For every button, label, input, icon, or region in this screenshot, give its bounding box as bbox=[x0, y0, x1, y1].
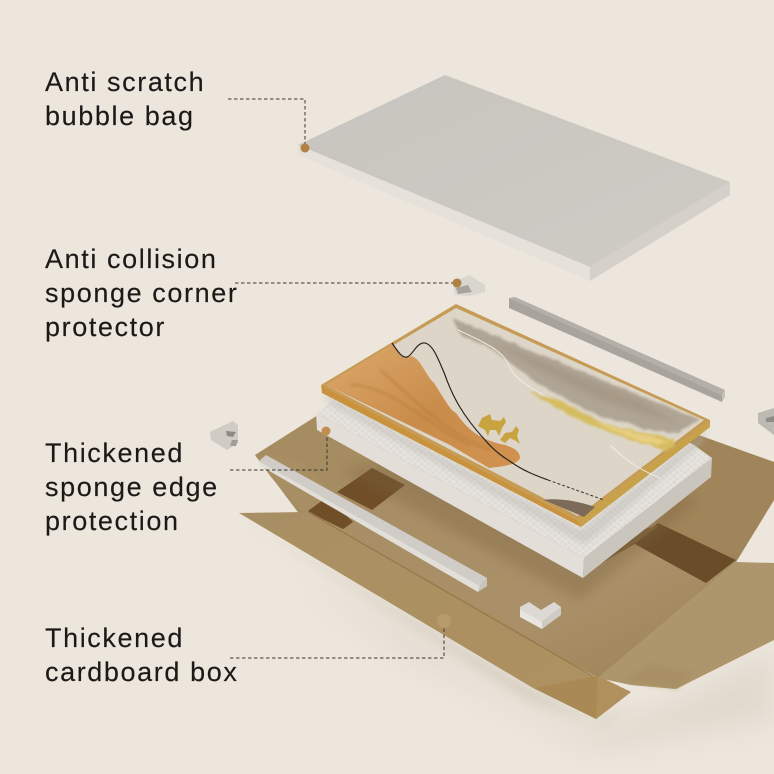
label: corner protector: protector bbox=[45, 312, 166, 342]
label: edge protection bbox=[45, 438, 219, 536]
deer bbox=[478, 414, 520, 444]
sponge shadow bbox=[340, 440, 700, 600]
label: bubble bag bbox=[45, 67, 205, 131]
box right front flap bbox=[598, 562, 774, 689]
label: edge protection: sponge edge bbox=[45, 472, 219, 502]
orange hill bbox=[326, 344, 520, 468]
label: corner protector bbox=[45, 244, 238, 342]
canvas bbox=[321, 304, 710, 520]
brown hill bbox=[544, 499, 595, 517]
box floor bbox=[342, 485, 736, 678]
dark inner wall left bbox=[337, 468, 405, 510]
grey-brown cloud bbox=[452, 318, 700, 434]
box front flap bbox=[239, 512, 596, 688]
box outer left side bbox=[255, 455, 340, 518]
bubble bag board bbox=[298, 75, 730, 281]
callout dots bbox=[300, 144, 462, 628]
painting shadow on sponge bbox=[322, 393, 710, 545]
framed painting bbox=[321, 304, 710, 527]
label: cardboard box: cardboard box bbox=[45, 657, 238, 687]
label: corner protector: Anti collision bbox=[45, 244, 217, 274]
long foam stick left bbox=[259, 455, 487, 592]
label: cardboard box bbox=[45, 623, 238, 687]
dark inner wall front left bbox=[308, 497, 353, 530]
anti collision corner top bbox=[453, 275, 485, 296]
box base fill bbox=[255, 415, 774, 678]
dark inner wall right bbox=[633, 523, 736, 583]
box right wall bbox=[620, 432, 774, 562]
label: edge protection: protection bbox=[45, 506, 180, 536]
label: bubble bag: Anti scratch bbox=[45, 67, 205, 97]
white vein bbox=[458, 330, 660, 478]
box bottom side bbox=[533, 676, 631, 719]
foam corner right bbox=[758, 408, 774, 435]
label: bubble bag: bubble bag bbox=[45, 101, 195, 131]
thickened sponge board bbox=[316, 320, 712, 578]
frame edge bbox=[321, 385, 710, 527]
black mountain line bbox=[392, 343, 548, 480]
upper right foam stick bbox=[509, 297, 725, 402]
label: corner protector: sponge corner bbox=[45, 278, 238, 308]
label: edge protection: Thickened bbox=[45, 438, 184, 468]
label: cardboard box: Thickened bbox=[45, 623, 184, 653]
callout lines bbox=[228, 99, 457, 658]
foam corner bottom bbox=[520, 602, 561, 629]
gold leaf bbox=[529, 392, 676, 450]
foam corner left bbox=[210, 421, 238, 450]
cardboard box bbox=[239, 415, 774, 719]
floor shadow bbox=[240, 516, 774, 750]
